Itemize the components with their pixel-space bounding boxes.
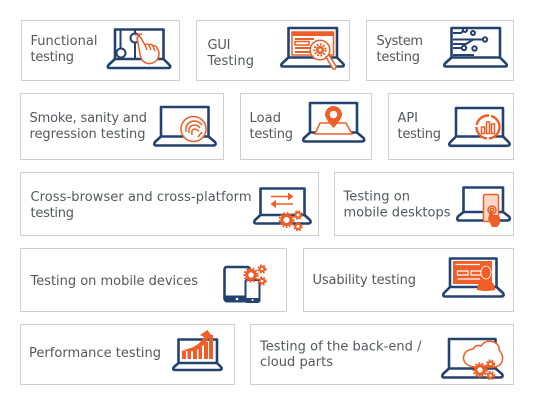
text: load testing xyxy=(250,111,293,142)
text: smoke, sanity and regression testing: regression testing xyxy=(30,127,146,142)
text: system testing: testing xyxy=(376,50,420,65)
panel: performance testing xyxy=(20,324,234,384)
text: functional testing: Functional xyxy=(30,34,98,49)
text: GUI testing: GUI xyxy=(208,38,230,53)
text: API testing xyxy=(398,111,441,142)
icon: tablet, phone and gears xyxy=(224,265,266,302)
text: GUI testing: Testing xyxy=(206,54,254,69)
text: testing of the back-end / cloud parts: Testing of the back-end / xyxy=(259,340,422,354)
text: testing on mobile devices: Testing on mobile devices xyxy=(30,274,198,289)
icon: laptop with growth chart xyxy=(173,330,222,370)
text: performance testing: Performance testing xyxy=(29,346,161,361)
icon: laptop with cloud and gears xyxy=(442,339,503,379)
text: testing on mobile desktops: Testing on xyxy=(342,190,410,204)
text: system testing: System xyxy=(376,34,423,49)
text: GUI testing xyxy=(206,38,254,69)
icon: laptop with window and user xyxy=(443,258,504,296)
text: testing of the back-end / cloud parts xyxy=(259,340,422,370)
icon: laptop with chart circle xyxy=(449,108,510,146)
panel: load testing xyxy=(240,94,372,160)
icon: laptop with circuit xyxy=(444,28,507,66)
panel: smoke, sanity and regression testing xyxy=(20,94,224,160)
panel: testing of the back-end / cloud parts xyxy=(250,324,514,384)
icon: laptop with touch hand xyxy=(108,29,170,68)
text: cross-browser and cross-platform testing: testing xyxy=(30,206,74,221)
text: testing on mobile desktops: mobile desktops xyxy=(344,206,451,220)
panel: testing on mobile desktops xyxy=(334,172,514,236)
panel: functional testing xyxy=(22,20,180,80)
panel: API testing xyxy=(388,94,514,160)
icon: laptop with magnifier and gear xyxy=(281,28,344,69)
icon: laptop with arrows and gears xyxy=(254,188,311,230)
panel: system testing xyxy=(366,20,514,80)
text: cross-browser and cross-platform testing xyxy=(30,190,252,221)
text: system testing xyxy=(376,34,423,65)
icon: laptop with fingerprint circle xyxy=(154,107,216,146)
text: API testing: testing xyxy=(398,127,441,142)
panel: GUI testing xyxy=(196,20,350,80)
text: cross-browser and cross-platform testing: Cross-browser and cross-platform xyxy=(30,190,252,205)
text: functional testing: testing xyxy=(30,50,74,65)
text: smoke, sanity and regression testing: Smoke, sanity and xyxy=(30,111,147,126)
panel: cross-browser and cross-platform testing xyxy=(20,172,318,236)
text: API testing: API xyxy=(398,111,418,126)
text: testing on mobile desktops xyxy=(342,190,451,220)
text: load testing: testing xyxy=(250,127,293,142)
text: smoke, sanity and regression testing xyxy=(30,111,147,142)
panel: testing on mobile devices xyxy=(20,248,286,312)
text: usability testing: Usability testing xyxy=(312,273,416,288)
icon: laptop with map pin xyxy=(303,103,364,142)
panel: usability testing xyxy=(304,248,514,312)
icon: laptop with phone and hand xyxy=(457,188,510,227)
text: load testing: Load xyxy=(250,111,281,126)
text: testing of the back-end / cloud parts: cloud parts xyxy=(260,355,333,370)
text: functional testing xyxy=(30,34,98,65)
